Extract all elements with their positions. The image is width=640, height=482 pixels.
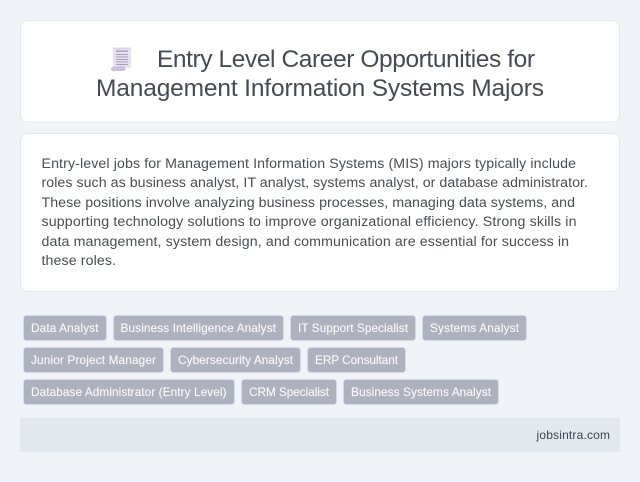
heading: Management Information Systems Majors	[96, 75, 544, 102]
tag: Data Analyst: Data Analyst	[31, 321, 99, 335]
heading	[96, 46, 544, 102]
tag: Junior Project Manager: Junior Project Manager	[31, 353, 156, 367]
heading: Entry Level Career Opportunities for	[157, 46, 535, 73]
tag: Business Systems Analyst: Business Systems Analyst	[351, 385, 492, 399]
text block: description: data management, system design, and communication are essential for success in	[42, 234, 569, 250]
tag: Junior Project Manager	[24, 348, 164, 372]
panel: title card	[20, 20, 620, 122]
text block: description	[42, 156, 588, 269]
tag: Database Administrator (Entry Level): Database Administrator (Entry Level)	[31, 385, 227, 399]
text block: description: Entry-level jobs for Management Information Systems (MIS) majors typically include	[42, 156, 576, 172]
tag: Business Systems Analyst	[344, 380, 498, 404]
tag: ERP Consultant: ERP Consultant	[315, 353, 399, 367]
tag: Data Analyst	[24, 316, 106, 340]
tag: Cybersecurity Analyst	[170, 348, 300, 372]
footer: jobsintra.com	[536, 428, 610, 442]
tag: Systems Analyst	[422, 316, 526, 340]
tag: Systems Analyst: Systems Analyst	[430, 321, 520, 335]
tag: ERP Consultant	[308, 348, 406, 372]
text block: description: supporting technology solutions to improve organizational efficiency. Strong skills in	[42, 214, 576, 230]
tag: CRM Specialist: CRM Specialist	[249, 385, 330, 399]
tag: IT Support Specialist: IT Support Specialist	[298, 321, 409, 335]
tag: IT Support Specialist	[290, 316, 416, 340]
text block: description: roles such as business analyst, IT analyst, systems analyst, or database administrator.	[42, 175, 588, 191]
tag: CRM Specialist	[242, 380, 336, 404]
footer	[20, 418, 620, 452]
text block: description: These positions involve analyzing business processes, managing data systems, and	[42, 195, 575, 211]
panel: description	[20, 134, 620, 292]
tag: Database Administrator (Entry Level)	[24, 380, 234, 404]
text block: description: these roles.	[42, 253, 116, 269]
tag: Business Intelligence Analyst: Business Intelligence Analyst	[120, 321, 277, 335]
icon: document scroll	[111, 48, 131, 71]
tag: Business Intelligence Analyst	[114, 316, 284, 340]
tag: Cybersecurity Analyst: Cybersecurity Analyst	[178, 353, 294, 367]
